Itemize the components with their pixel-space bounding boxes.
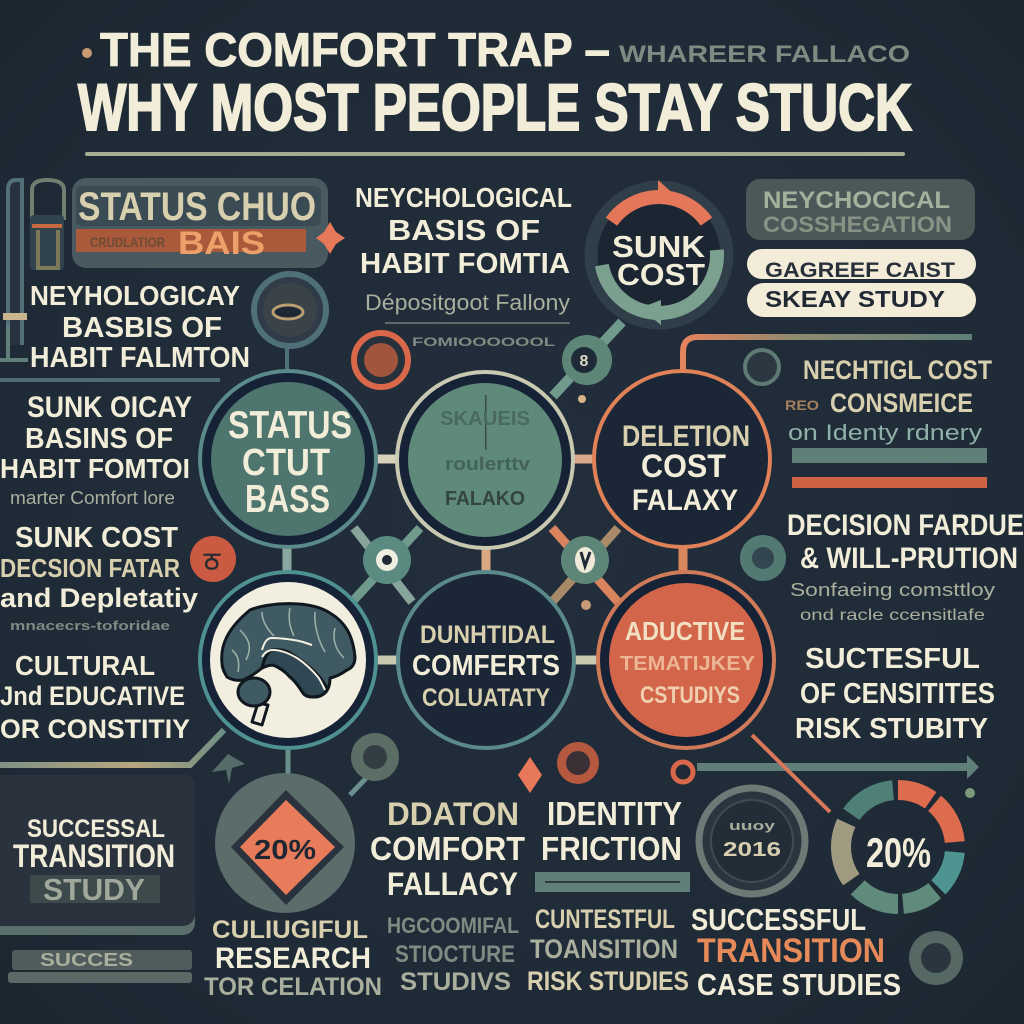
- title: WHAREER FALLACO: [619, 41, 910, 68]
- circle: adaptive studies: CSTUDIYS: [640, 682, 740, 709]
- connector: coral line to donut: [752, 735, 830, 812]
- panel: successful transition study: SUCCESSAL: [27, 815, 165, 843]
- text: duration comfort fallacy: FALLACY: [387, 866, 518, 902]
- icon: sunk cost cycle: SUNK: [612, 229, 706, 264]
- text: left column neurological basis: BASBIS OF: [62, 312, 222, 344]
- text: successful transition case studies: [691, 902, 901, 1002]
- icon: small arrow: [212, 754, 245, 784]
- icon: year ring: [699, 788, 805, 894]
- panel: status quo bias: CRUDLATIOR: [90, 234, 165, 250]
- text: successful transition case studies: SUCCESSFUL: [691, 902, 866, 937]
- text: identity cost block: REO: [785, 397, 819, 413]
- node: middle right: [561, 536, 609, 584]
- icon: 20% diamond: [215, 773, 355, 913]
- panel: study pill: SKEAY STUDY: [765, 286, 945, 312]
- text: transition risk studies: TOANSITION: [530, 934, 678, 964]
- panel: career cost pill: [747, 249, 976, 282]
- title: [78, 23, 912, 156]
- text: successful risk study: SUCTESFUL: [805, 643, 980, 675]
- text: successful transition case studies: TRANSITION: [697, 932, 885, 970]
- circle: dunhtidal comforts: DUNHTIDAL: [420, 621, 555, 649]
- circle: adaptive studies: ADUCTIVE: [625, 616, 745, 646]
- text: left column neurological basis: HABIT FALMTON: [30, 342, 250, 374]
- icon: coral ring bottom: [557, 742, 599, 784]
- icon: bottom left line: [0, 730, 224, 765]
- icon: dark node: [288, 733, 399, 795]
- text: cultural research: RESEARCH: [215, 942, 371, 975]
- text: middle column heading: [355, 182, 572, 349]
- circle: adaptive studies: [598, 572, 774, 748]
- text: left column sunk basis: SUNK OICAY: [27, 391, 192, 424]
- arrow: lower divider: [673, 755, 979, 782]
- icon: 20% diamond: 20%: [254, 834, 316, 865]
- icon: year ring: uuoy: [729, 818, 776, 833]
- circle: fallacy: roulerttv: [445, 454, 530, 474]
- text: middle column heading: NEYCHOLOGICAL: [355, 182, 572, 213]
- text: left column sunk basis: marter Comfort lore: [10, 488, 175, 508]
- text: middle column heading: HABIT FOMTIA: [360, 248, 570, 280]
- text: identity friction: FRICTION: [541, 830, 682, 867]
- circle: dunhtidal comforts: [398, 572, 574, 748]
- circle: status quo bias: [200, 371, 376, 547]
- panel: neurological consideration: NEYCHOCICAL: [763, 187, 950, 214]
- circle: fallacy: SKAUEIS: [440, 408, 530, 430]
- panel: successful transition study: [0, 775, 195, 935]
- panel: successful transition study: STUDY: [43, 872, 145, 907]
- panel: career cost pill: GAGREEF CAIST: [765, 259, 955, 282]
- text: left column cultural: CULTURAL: [15, 650, 155, 681]
- icon: coral ring node: [354, 333, 408, 387]
- circle: deletion cost fallacy: COST: [641, 448, 726, 484]
- circle: status quo bias: STATUS: [228, 404, 352, 447]
- text: successful transition case studies: CASE STUDIES: [697, 967, 901, 1002]
- icon: coral diamond: [518, 757, 542, 793]
- text: identity cost block: [745, 350, 992, 488]
- icon: coral star: [316, 222, 345, 254]
- text: identity cost block: CONSMEICE: [830, 388, 973, 418]
- chart: donut 20%: 20%: [866, 829, 931, 876]
- text: left column sunk cost: mnacecrs-toforidae: [10, 618, 170, 633]
- panel: status quo bias: STATUS CHUO: [78, 185, 316, 229]
- text: left column neurological basis: [0, 280, 250, 382]
- connectors: between circles: [287, 459, 683, 660]
- panel: neurological consideration: [746, 179, 975, 240]
- text: left column sunk basis: BASINS OF: [25, 423, 173, 455]
- text: left column sunk cost: and Depletatiy: [0, 583, 198, 613]
- text: cultural research: CULIUGIFUL: [212, 916, 368, 944]
- connector: coral line to identity panel: [683, 337, 972, 382]
- icon: left pipe and lock: [0, 180, 64, 360]
- text: decision fatigue: Sonfaeing comsttloy: [790, 580, 995, 600]
- icon: coral node left: [190, 536, 236, 582]
- connector: sunk cost node: 8: [580, 353, 589, 370]
- chart: donut 20%: [818, 767, 978, 927]
- text: left column cultural: OR CONSTITIY: [0, 714, 190, 744]
- text: left column sunk cost: DECSION FATAR: [0, 553, 180, 583]
- text: cultural research: [204, 916, 382, 1001]
- text: transition risk studies: [527, 904, 689, 996]
- text: left column cultural: [0, 650, 190, 744]
- circle: deletion cost fallacy: DELETION: [622, 420, 750, 453]
- text: left column sunk cost: SUNK COST: [15, 522, 178, 554]
- text: successful risk study: OF CENSITITES: [800, 678, 995, 710]
- circle: status quo bias: CTUT: [242, 442, 330, 484]
- panel: study pill: [747, 283, 976, 317]
- icon: coral node left: ਠ: [203, 547, 221, 574]
- panel: lower bands: SUCCES: [40, 950, 133, 970]
- text: identity cost block: on Identy rdnery: [788, 420, 982, 445]
- icon: small bottom ring: [909, 931, 963, 985]
- text: structure studies: STUDIVS: [400, 968, 511, 996]
- text: left column sunk basis: HABIT FOMTOI: [0, 453, 190, 484]
- circle: fallacy: FALAKO: [445, 488, 525, 510]
- text: identity cost block: NECHTIGL COST: [803, 355, 992, 385]
- icon: sunk cost cycle: COST: [617, 257, 705, 292]
- text: structure studies: [387, 913, 519, 996]
- icon: year ring: 2016: [723, 839, 781, 861]
- text: decision fatigue: [787, 509, 1024, 624]
- circle: deletion cost fallacy: FALAXY: [632, 484, 738, 517]
- decoration dots: [578, 395, 975, 798]
- node: right: [740, 535, 786, 581]
- text: left column sunk basis: [0, 391, 192, 508]
- text: middle column heading: Dépositgoot Fallony: [365, 290, 570, 315]
- panel: status quo bias: BAIS: [178, 225, 265, 261]
- text: duration comfort fallacy: COMFORT: [370, 830, 525, 867]
- node: middle left: [363, 536, 411, 584]
- icon: eye node: [254, 274, 326, 371]
- text: successful risk study: [795, 643, 995, 745]
- text: decision fatigue: ond racle ccensitlafe: [800, 607, 985, 624]
- circle: adaptive studies: TEMATIJKEY: [620, 653, 756, 675]
- panel: neurological consideration: COSSHEGATION: [763, 212, 952, 237]
- circle: dunhtidal comforts: COLUATATY: [422, 684, 550, 712]
- text: structure studies: STIOCTURE: [395, 941, 515, 968]
- panel: successful transition study: TRANSITION: [13, 838, 175, 874]
- circle: fallacy: [397, 372, 573, 548]
- text: middle column heading: BASIS OF: [388, 215, 540, 247]
- connector: sunk cost node: [553, 322, 622, 396]
- icon: sunk cost cycle: [578, 174, 740, 336]
- text: identity friction: [535, 795, 690, 892]
- circle: deletion cost fallacy: [594, 371, 770, 547]
- text: duration comfort fallacy: DDATON: [387, 796, 519, 832]
- text: left column sunk cost: [0, 522, 198, 633]
- text: left column neurological basis: NEYHOLOGICAY: [30, 280, 240, 311]
- title: THE COMFORT TRAP –: [100, 23, 610, 76]
- panel: status quo bias: [72, 178, 328, 268]
- text: identity friction: IDENTITY: [547, 795, 682, 832]
- text: duration comfort fallacy: [370, 796, 525, 902]
- text: middle column heading: FOMIOOOOOOL: [412, 335, 555, 349]
- text: transition risk studies: RISK STUDIES: [527, 966, 689, 996]
- circle: brain: [200, 572, 376, 748]
- text: transition risk studies: CUNTESTFUL: [535, 904, 675, 934]
- panel: lower bands: [8, 950, 192, 983]
- icon: brain: [222, 604, 355, 725]
- circle: dunhtidal comforts: COMFERTS: [412, 650, 560, 682]
- text: left column cultural: Jnd EDUCATIVE: [0, 681, 185, 711]
- circle: status quo bias: BASS: [245, 478, 330, 521]
- text: structure studies: HGCOOMIFAL: [387, 913, 519, 938]
- text: cultural research: TOR CELATION: [204, 973, 382, 1001]
- text: successful risk study: RISK STUBITY: [795, 713, 988, 745]
